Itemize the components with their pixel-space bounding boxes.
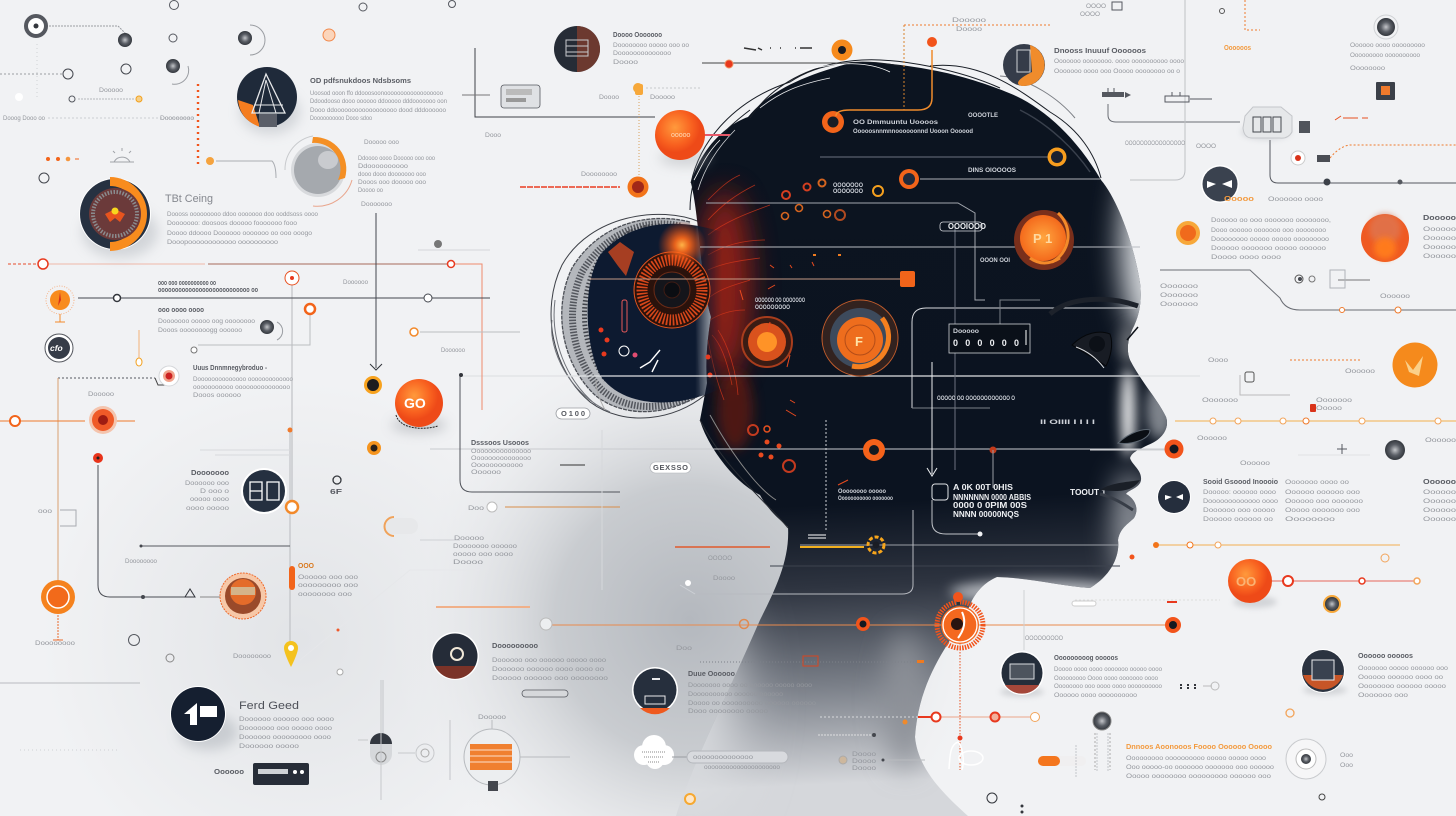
pill labels — [501, 83, 691, 473]
dial: orange core — [742, 317, 792, 367]
text block: top right: Ooooooo oooo ooo Ooooo oooooooo oo o — [1054, 68, 1180, 75]
text block: top right — [1054, 3, 1425, 150]
icon: ring dial bottom right — [1286, 739, 1326, 779]
text block: top center: Doooo — [613, 59, 638, 66]
text block: neck: OOOOO — [708, 555, 732, 562]
icon: triangle tool circle — [237, 67, 300, 134]
dial: big orange F — [822, 300, 898, 376]
text block: E|D: D ooo o — [200, 488, 229, 495]
text block: monitor: Ooooooooog ooooos — [1054, 653, 1118, 662]
neck small labels: Doooo — [852, 751, 876, 758]
text blocks right: Ooooooo — [1160, 283, 1199, 290]
icon: magnifier orange lens — [464, 714, 570, 791]
text block: top center: Doooooooooooooo — [613, 50, 671, 57]
icon: orange coin — [220, 573, 266, 619]
text blocks right: Sooid Gsoood Inoooio — [1203, 477, 1278, 486]
text block: middle left: ooo ooo oooooooooo oo — [158, 278, 216, 287]
nodes right — [1072, 151, 1441, 800]
text block: top center: Dooooo — [650, 94, 675, 101]
text block: coin: Doooooooo — [233, 653, 271, 660]
text block: center small: Doo — [468, 505, 484, 512]
text block: Ferd Geed: Ferd Geed — [239, 700, 299, 712]
text block: orange title bottom right: Dnnoos Aoonooos Foooo Oooooo Ooooo — [1126, 742, 1272, 751]
text block: neck: Doo — [676, 645, 692, 652]
icon: red node left — [89, 406, 117, 434]
icon: orange GO ball: GO — [404, 395, 426, 411]
text block: top right: Dnooss Inuuuf Oooooos — [1054, 46, 1146, 55]
text block: top right: Oooooos — [1224, 43, 1251, 52]
orange small nodes top — [628, 37, 937, 198]
text blocks right: Oooooo — [1423, 235, 1456, 242]
text block: dark gold: Dooooooooo — [492, 641, 538, 650]
text block: E|D: oooo ooooo — [186, 505, 229, 512]
text block: left center: Dooos oooooo — [193, 392, 241, 399]
text blocks right: Ooooooo — [1202, 397, 1239, 404]
icon: tP dark circle — [170, 686, 238, 750]
text blocks right: Ooooo ooooooo ooo — [1285, 507, 1360, 514]
head labels: OOON OOI — [980, 257, 1010, 264]
text block: moon: Doooo oo — [358, 187, 383, 194]
text block: left center: Dooooo — [88, 391, 114, 398]
text block: coin: ooooooooo ooo — [298, 582, 359, 589]
icon: dark bow right 2 — [1157, 480, 1191, 514]
text block: dark gold — [492, 641, 608, 697]
text block: middle left: Dooog Dooo oo — [3, 115, 45, 122]
icon: outline cloud bottom — [949, 736, 983, 770]
text blocks right: Dooooo ooooooo ooooo oooooo — [1211, 245, 1326, 252]
text blocks right: Doooooo ooo ooooo — [1203, 507, 1275, 514]
icon: dark bow right 1 — [1201, 165, 1239, 203]
icon: dark circle monitor — [1000, 651, 1044, 697]
text block: dial: TBt Ceing — [165, 193, 213, 205]
icon: orange slider — [1038, 733, 1108, 777]
text blocks right: Dooooo: oooooo oooo — [1203, 489, 1276, 496]
text block: top left 1 — [310, 76, 447, 122]
text block: neck: Doooo — [713, 575, 735, 582]
text block: top right: Oooooo oooo ooooooooo — [1350, 42, 1425, 49]
head labels: NNNN 00000NQS — [953, 510, 1020, 519]
text block: E|D: Doooooo ooo — [185, 480, 229, 487]
icon: big orange ring — [41, 580, 195, 640]
text block: middle left: Dooos oooooooogg oooooo — [158, 327, 242, 334]
text block: moon: Dooooo ooo — [364, 139, 399, 146]
text block: moon: Ddoooooooooo — [358, 163, 408, 170]
dial: big orange P1 — [1014, 210, 1074, 270]
text block: center small: Dooooo — [454, 535, 484, 542]
icon: moon dial — [285, 136, 352, 206]
orange ball top: OOOOO — [671, 133, 691, 139]
text blocks right: Dooo oooooo ooooooo ooo oooooooo — [1211, 227, 1326, 234]
icon: cloud — [634, 735, 788, 771]
text block: left center — [88, 363, 293, 399]
text blocks right: Oooooo — [1423, 507, 1456, 514]
text block: Ferd Geed: Doooooo oooooo ooo oooo — [239, 716, 334, 723]
text block: doc right: Oooooo oooooo oooo oo — [1358, 674, 1443, 681]
text block: neck: Doooo oo oooooooooo oooooo oooooo — [688, 700, 816, 707]
text block: left center: Uuus Dnnmnegybroduo - — [193, 363, 267, 372]
data box with dots: 0 0 0 0 0 0 — [953, 338, 1019, 348]
head labels: OOOOO OO OOOOOOOOOOOO O — [937, 395, 1015, 402]
text block: dark gold: Doooooo ooo oooooo ooooo oooo — [492, 657, 606, 664]
text block: orange title bottom right — [1025, 635, 1353, 780]
text block: middle left: ooo oooo oooo — [158, 305, 204, 314]
orange ball top — [655, 110, 711, 166]
text block: E|D: Doooooooo — [125, 558, 157, 565]
text block: monitor: Doooo oooo oooo ooooooo ooooo oooo — [1054, 666, 1162, 673]
text block: top right: Oooooooo — [1350, 65, 1385, 72]
head labels: NNNNNNN 0000 ABBIS — [953, 493, 1032, 502]
text blocks right: Doooooooo ooooo ooooo ooooooooo — [1211, 236, 1329, 243]
text block: moon: Dooooooo — [361, 201, 392, 208]
text block: center small: Oooooo — [471, 469, 501, 476]
text blocks right: Oooooo — [1423, 498, 1456, 505]
text block: middle left: Dooo — [485, 132, 501, 139]
text block: middle left: Dooooooo ooooo oog oooooooo — [158, 318, 255, 325]
icon: orange orb GO right: OO — [1236, 574, 1256, 589]
text block: middle left: Doooooo — [343, 279, 368, 286]
hair strands — [690, 60, 1101, 528]
text blocks right: Oooooo — [1423, 226, 1456, 233]
neck small labels: Doooo — [852, 765, 876, 772]
bun — [588, 224, 722, 410]
head labels: 0000 0 0PIM 00S — [953, 501, 1028, 510]
face lighting — [688, 176, 1167, 786]
text block: E|D: Dooooooo — [191, 468, 229, 477]
text block: doc right: Ooooooo ooo — [1358, 692, 1408, 699]
text blocks right: Oooooo — [1423, 516, 1456, 523]
text block: doc right — [1358, 651, 1448, 699]
text block: left center: ooooooooooo ooooooooooooooo — [193, 384, 290, 391]
text blocks right: Oooooo — [1423, 489, 1456, 496]
text blocks right: Doooo oooo oooo — [1211, 254, 1282, 261]
text block: orange title bottom right: OOOOOOOOO — [1025, 635, 1063, 642]
text block: orange title bottom right: Ooooo oooooooo ooooooooo oooooo ooo — [1126, 773, 1271, 780]
text block: top left 1: Uoosod ooon ffo ddooosoonoooooooooooooooooo — [310, 90, 443, 97]
text block: dark gold: Doooooo oooooo oooo oooo oo — [492, 666, 604, 673]
icon: orange orb right — [1392, 342, 1438, 388]
text block: neck: Duue Oooooo — [688, 669, 735, 678]
text block: orange title bottom right: Ooooooooo oooooooooo ooooo ooooo oooo — [1126, 755, 1266, 762]
text block: dial: Doooo ddoooo Doooooo ooooooo oo ooo ooogo — [167, 230, 312, 237]
dial: big orange P1: P 1 — [1033, 231, 1052, 246]
icon: dial with orange ring — [79, 177, 158, 258]
text block: moon: Dooos ooo dooooo ooo — [358, 179, 426, 186]
text block: top center: Doooooooo — [581, 171, 617, 178]
head labels: TOOUT 1 — [1070, 488, 1107, 497]
icon: half ball device — [358, 680, 434, 800]
text blocks right: Oooooo — [1345, 368, 1375, 375]
text block: orange title bottom right: Ooo — [1340, 762, 1353, 769]
neck small labels: Doooo — [852, 758, 876, 765]
text block: moon — [358, 139, 435, 208]
white horizontal lines — [430, 157, 1200, 566]
text block: coin: Doooooooo — [35, 640, 75, 647]
text block: center small: Ooooooooooooooo — [471, 455, 531, 462]
text block: moon: Ddoooo oooo Dooooo ooo ooo — [358, 155, 435, 162]
head nodes and small icons — [680, 111, 1066, 594]
text block: top center: Dooooo — [952, 17, 987, 24]
text blocks right: Dooooo — [1423, 213, 1456, 222]
text block: top left 1: OD pdfsnukdoos Ndsbsoms — [310, 76, 411, 85]
text block: middle left: Doooooooo — [160, 115, 194, 122]
text block: doc right: Ooooooo ooooo oooooo ooo — [1358, 665, 1448, 672]
orange pill — [60, 510, 418, 536]
text block: dial — [165, 193, 318, 246]
text block: dial: Dooopoooooooooooo oooooooooo — [167, 239, 278, 246]
head labels: OOOIOOO — [948, 222, 986, 231]
text block: left center: Doooooooooooooo ooooooooooooo — [193, 376, 293, 383]
text block: top right: OOOOOOOOOOOOOOOO — [1125, 140, 1185, 147]
icon: cfo badge: cfo — [50, 343, 63, 353]
text block: top center: Doooooooo ooooo ooo oo — [613, 42, 689, 49]
icon: dark top right — [1003, 44, 1045, 86]
text block: top right: Ooooooo oooooooo. oooo oooooooooo oooo — [1054, 58, 1184, 65]
text blocks right: Oooo — [1208, 357, 1228, 364]
head labels: II OIIII I I I I — [1040, 419, 1095, 426]
text blocks right: Oooooooo — [1285, 516, 1336, 523]
text blocks right — [1160, 194, 1456, 523]
head labels: Ooooooooooo ooooooo — [838, 495, 893, 502]
red hair strands — [706, 175, 770, 400]
text blocks right: Ooooooo — [1160, 292, 1199, 299]
text block: center small: ooooo ooo oooo — [453, 551, 513, 558]
line network: left — [0, 25, 1170, 780]
icon: cloud: oooooooooooooo — [693, 754, 753, 761]
text block: Ferd Geed — [239, 700, 334, 750]
head labels: OOOOOOO — [833, 188, 863, 195]
text block: orange title bottom right: Ooo ooooo-oo ooooooo ooooooo ooo oooooo — [1126, 764, 1274, 771]
icon: orange red orb — [1361, 213, 1409, 262]
head labels: A 0K 00T 0HIS — [953, 483, 1014, 492]
text block: E|D: ooo — [38, 508, 52, 515]
panel: head silhouette — [430, 59, 1200, 816]
icon: dark top — [554, 26, 600, 72]
text block: monitor — [1054, 653, 1219, 699]
head labels — [755, 112, 1107, 519]
face features — [1050, 299, 1150, 510]
text block: Ferd Geed: Doooooo ooooo — [239, 743, 299, 750]
text blocks right: Oooooo oooooo ooo — [1285, 489, 1360, 496]
text block: center small: Doooo — [453, 559, 484, 566]
icon: neck sunburst — [937, 592, 983, 648]
text block: top left 1: Ddoodooso dooo oooooo ddooooo dddooooooo oon — [310, 98, 447, 105]
text block: center small: Dooooooo oooooo — [453, 543, 517, 550]
red node — [159, 366, 179, 386]
text block: doc right: Oooooooo oooooo ooooo — [1358, 683, 1446, 690]
text block: coin: OOO — [298, 561, 314, 570]
text block: top center: Doooo — [956, 26, 983, 33]
text block: coin: Oooooo ooo ooo — [298, 574, 358, 581]
icon: orange GO ball — [364, 376, 447, 455]
data box with dots — [949, 324, 1030, 353]
text block: moon: dooo dooo dooooooo ooo — [358, 171, 426, 178]
text block: center small — [453, 438, 531, 566]
neck small labels — [818, 733, 884, 772]
text block: top right: OOOO — [1196, 143, 1216, 150]
pill labels: O100 — [561, 409, 585, 418]
text block: neck: Dooo oooooooo ooooo — [688, 708, 768, 715]
text blocks right: Oooooo — [1423, 253, 1456, 260]
text block: center small: Oooooooooooo — [471, 462, 523, 469]
text block: coin — [35, 561, 359, 660]
text block: dial: Dooooooo: doosoos dooooo fooooooo fooo — [167, 220, 297, 227]
text blocks right: Oooooo ooo ooooooo — [1285, 498, 1363, 505]
icon: orange orb GO right — [1228, 559, 1277, 608]
dial: big orange F: F — [855, 334, 863, 349]
text block: dial: Doooss ooooooooo ddoo ooooooo doo ooddsoss oooo — [167, 211, 318, 218]
text blocks right: Dooooo oo ooo ooooooo oooooooo, — [1211, 217, 1331, 224]
text blocks right: Ooooooo oooo oo — [1285, 479, 1349, 486]
text block: center small: Dsssoos Usooos — [471, 438, 529, 447]
eye circle — [598, 221, 712, 378]
text blocks right: Dooooooooooooo oooo — [1203, 498, 1278, 505]
icon: dark circle doc right — [1301, 649, 1347, 695]
text block: E|D — [38, 468, 343, 565]
text block: middle left: Doooooo — [441, 347, 465, 354]
badge — [214, 763, 309, 785]
text block: center small: Ooooooooooooooo — [471, 448, 531, 455]
text blocks right: Oooooo — [1423, 244, 1456, 251]
text block: top left 1: Dooo ddoooooooooooooooooo dood dddoooooo — [310, 107, 446, 114]
text block: dark gold: Dooooo oooooo ooo oooooooo — [492, 675, 608, 682]
text block: top center — [581, 17, 987, 178]
icon: E|D dark circle — [241, 468, 287, 514]
text blocks right: Oooooo — [1197, 435, 1227, 442]
icon: cloud: ooooooooooooooooooooo — [704, 764, 780, 771]
head labels: OOOOOOO — [833, 182, 863, 189]
icon: dark circle screen — [632, 667, 678, 714]
text block: neck — [676, 555, 924, 715]
line network: right — [1075, 0, 1456, 770]
text blocks right: Ooooooo oooo — [1268, 196, 1323, 203]
text block: middle left — [3, 87, 501, 354]
text block: Ferd Geed: Dooooooo ooo ooooo oooo — [239, 725, 332, 732]
text block: top right: Ooooooooo oooooooooo — [1350, 52, 1420, 59]
icons: devices top right — [1102, 2, 1398, 133]
text block: top right: OOOO — [1086, 3, 1106, 10]
text block: E|D: ooooo oooo — [190, 496, 229, 503]
text blocks right: Oooooo — [1423, 477, 1456, 486]
head labels: OOOOTLE — [968, 112, 999, 119]
text blocks right: Oooooo — [1240, 460, 1270, 467]
head labels: OO Dmmuuntu Uoooos — [853, 119, 938, 126]
text blocks right: Ooooooo — [1316, 397, 1353, 404]
text blocks right: Ooooooo — [1160, 301, 1199, 308]
icon: cfo badge — [45, 334, 73, 362]
head labels: Ooooosnnmnnoooooonnd Uooon Oooood — [853, 128, 973, 135]
text blocks right: Dooooo oooooo oo — [1203, 516, 1273, 523]
text block: neck: Dooooooo oooo oo oooooo ooooo oooo — [688, 682, 812, 689]
text block: middle left: ooooooooooooooooooooooooooo oo — [158, 285, 258, 294]
head labels: OOOOOO OO OOOOOOO — [755, 297, 805, 304]
icon: magnifier orange lens: Dooooo — [478, 714, 506, 721]
text block: top left 1: Doooooooooo Dooo sdoo — [310, 115, 372, 122]
text block: neck: Doooooooooo oooooo oooooo — [688, 691, 783, 698]
text blocks right: Ooooo — [1224, 194, 1255, 203]
badge: Oooooo — [214, 767, 244, 776]
text block: Ferd Geed: Doooooo ooooooooo oooo — [239, 734, 331, 741]
text blocks right: Oooooo — [1380, 293, 1410, 300]
icon: dark circle gold — [431, 632, 479, 680]
head labels: OOOOOOOOO — [755, 304, 790, 311]
text block: top center: Doooo — [599, 94, 619, 101]
text block: monitor: Oooooooo ooo oooo oooo oooooooooo — [1054, 683, 1162, 690]
bun scribble — [551, 214, 705, 418]
pill labels: GEXSSO — [653, 463, 688, 472]
text blocks right: Ooooo — [1316, 405, 1342, 412]
text block: doc right: Oooooo ooooos — [1358, 651, 1413, 660]
text block: orange title bottom right: Ooo — [1340, 752, 1353, 759]
text block: coin: oooooooo ooo — [298, 591, 352, 598]
text block: top center: Doooo Ooooooo — [613, 30, 662, 39]
text blocks right: Oooooo — [1425, 437, 1456, 444]
head labels: DINS OIOOOOS — [968, 167, 1017, 174]
icon: yellow pin — [284, 641, 298, 667]
data box with dots: Dooooo — [953, 328, 979, 335]
text block: middle left: Dooooo — [99, 87, 123, 94]
icon: cloud server — [1241, 107, 1292, 140]
head labels: Oooooooo ooooo — [838, 488, 886, 495]
text block: monitor: Ooooooooo Oooo oooo ooooooo oooo — [1054, 675, 1158, 682]
text block: monitor: Oooooo oooo oooooooooo — [1054, 692, 1137, 699]
icon: orange burst left — [46, 286, 74, 322]
text block: top right: OOOO — [1080, 11, 1100, 18]
text block: E|D: 6F — [330, 487, 343, 496]
